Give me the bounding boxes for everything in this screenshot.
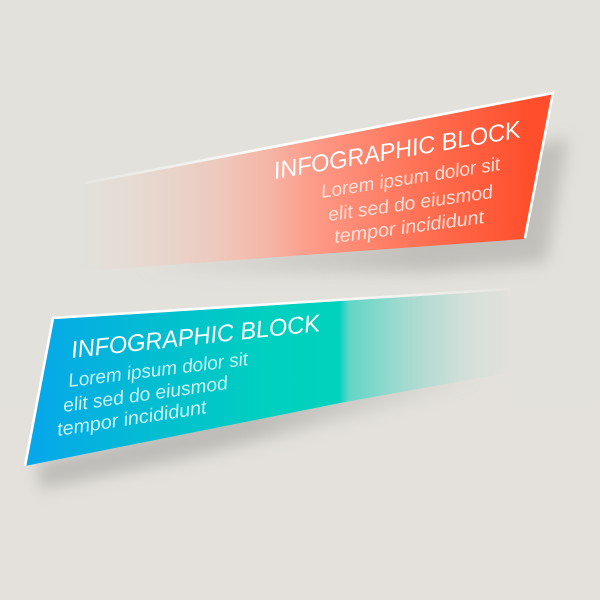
red block white border xyxy=(85,93,553,238)
blue block text line 2: elit sed do eiusmod xyxy=(62,373,231,417)
panel: blue infographic block xyxy=(25,288,512,489)
blue block text line 1: Lorem ipsum dolor sit xyxy=(67,349,250,392)
red block text line 2: elit sed do eiusmod xyxy=(327,182,496,226)
panel: red infographic block xyxy=(80,92,568,274)
red block text line 1: Lorem ipsum dolor sit xyxy=(320,154,502,203)
blue block white border xyxy=(25,289,510,466)
red block text line 3: tempor incididunt xyxy=(333,207,486,248)
blue block text line 3: tempor incididunt xyxy=(56,397,209,441)
blue block body xyxy=(25,288,512,466)
red block body xyxy=(80,92,554,270)
blue block shadow xyxy=(38,345,470,489)
red block heading: INFOGRAPHIC BLOCK xyxy=(271,116,523,185)
blue block heading: INFOGRAPHIC BLOCK xyxy=(70,310,322,364)
red block shadow xyxy=(130,138,568,274)
